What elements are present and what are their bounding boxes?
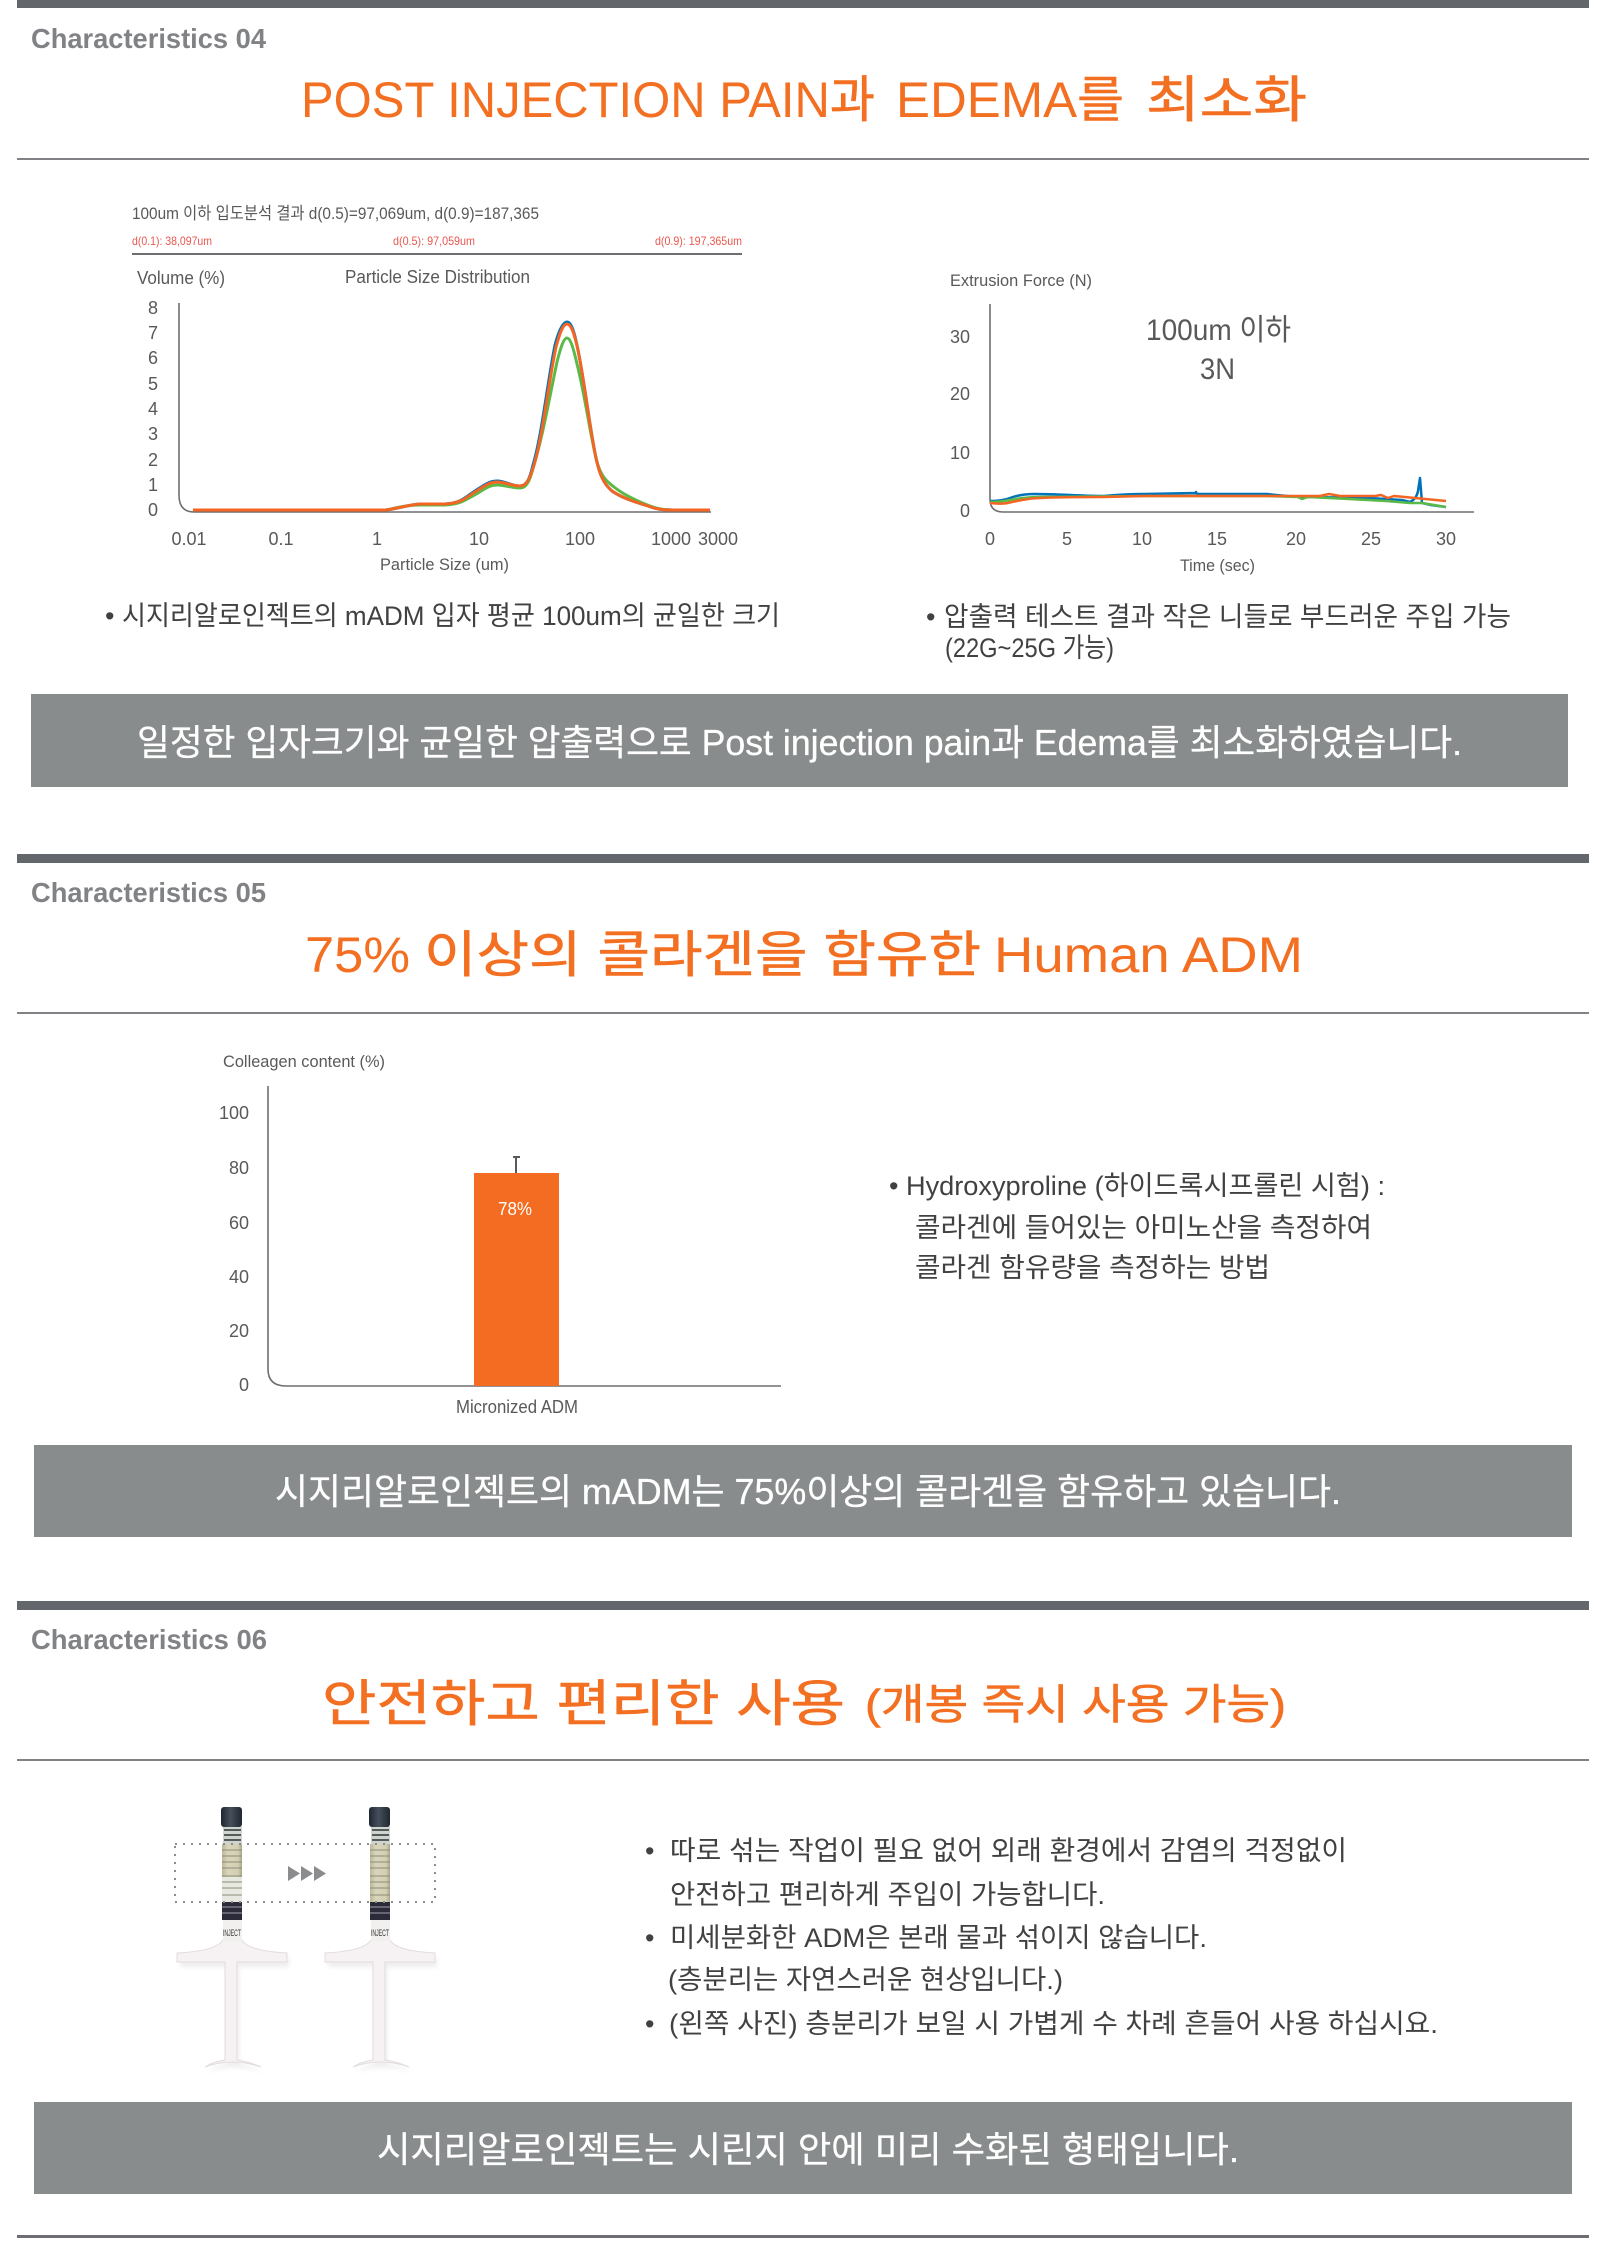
y axis ticks: 30 (950, 327, 970, 347)
panel: characteristics 06 (17, 1601, 1589, 2238)
text: extrusion note: 압출력 테스트 결과 작은 니들로 부드러운 주입 가능 (944, 602, 1511, 632)
x axis ticks: 15 (1207, 529, 1227, 549)
annotation 100um: 100um 이하 (1146, 314, 1291, 347)
red percentile labels: d(0.1): 38,097um (132, 234, 212, 248)
banner 04: 일정한 입자크기와 균일한 압출력으로 Post injection pain과 Edema를 최소화하였습니다. (137, 722, 1462, 763)
title: post injection pain (301, 72, 1307, 128)
title: safe and convenient: 안전하고 편리한 사용 (322, 1676, 845, 1732)
title: collagen: Human ADM (994, 927, 1303, 983)
section bar 05 (17, 854, 1589, 863)
dotted highlight box (175, 1844, 435, 1902)
title: collagen: 이상의 콜라겐을 함유한 (424, 927, 981, 983)
y axis ticks: 40 (229, 1267, 249, 1287)
y axis ticks: 0 (148, 500, 158, 520)
curve: blue (193, 322, 710, 510)
title: post injection pain: EDEMA를 (896, 72, 1124, 128)
x axis ticks: 0.1 (268, 529, 294, 549)
axes (179, 303, 711, 512)
y axis ticks: 0 (239, 1375, 249, 1395)
y axis ticks: 60 (229, 1213, 249, 1233)
y axis title: Volume (%) (137, 268, 225, 288)
title: post injection pain: 최소화 (1146, 72, 1307, 128)
bar: micronized ADM (474, 1173, 559, 1386)
text: extrusion note: (22G~25G 가능) (945, 633, 1114, 663)
x axis ticks: 100 (565, 529, 595, 549)
banner 06: 시지리알로인젝트는 시린지 안에 미리 수화된 형태입니다. (377, 2129, 1239, 2170)
title rule 04 (17, 158, 1589, 160)
illustration: syringes (175, 1807, 437, 2072)
axes (990, 304, 1474, 512)
red percentile labels: d(0.9): 197,365um (655, 234, 742, 248)
x axis ticks (985, 529, 1456, 549)
text: usage notes: (층분리는 자연스러운 현상입니다.) (668, 1965, 1063, 1995)
syringe left: INJECT (223, 1928, 241, 1938)
x axis ticks: 25 (1361, 529, 1381, 549)
banner 06 (34, 2102, 1572, 2194)
section bar 04 (17, 0, 1589, 8)
y axis ticks: 1 (148, 475, 158, 495)
section label 04: Characteristics 04 (31, 23, 266, 54)
annotation 3N: 3N (1200, 353, 1235, 386)
text: particle size note: • (105, 601, 114, 631)
y axis ticks (950, 327, 970, 521)
y axis ticks: 0 (960, 501, 970, 521)
text: usage notes: 안전하고 편리하게 주입이 가능합니다. (670, 1880, 1105, 1910)
panel: characteristics 05 (17, 854, 1589, 1537)
y axis ticks (219, 1103, 249, 1395)
bar category: Micronized ADM (456, 1397, 578, 1417)
y axis ticks: 20 (229, 1321, 249, 1341)
x axis ticks (171, 529, 738, 549)
error bar (513, 1157, 520, 1173)
curve: green (990, 496, 1446, 507)
text: hydroxyproline note: • (889, 1171, 898, 1201)
y axis ticks: 80 (229, 1158, 249, 1178)
heading rule (132, 253, 742, 255)
section label 05: Characteristics 05 (31, 877, 266, 908)
text: hydroxyproline note (889, 1171, 1385, 1283)
syringe left (177, 1807, 289, 2072)
y axis ticks: 8 (148, 298, 158, 318)
syringe right (325, 1807, 437, 2072)
title: safe and convenient: (개봉 즉시 사용 가능) (865, 1681, 1286, 1728)
x axis ticks: 30 (1436, 529, 1456, 549)
x axis ticks: 20 (1286, 529, 1306, 549)
banner 05 (34, 1445, 1572, 1537)
y axis ticks: 5 (148, 374, 158, 394)
curve: green (193, 338, 710, 510)
syringe right: INJECT (371, 1928, 389, 1938)
red percentile labels: d(0.5): 97,059um (393, 234, 475, 248)
y axis ticks: 3 (148, 424, 158, 444)
chart heading: 100um 이하 입도분석 결과 d(0.5)=97,069um, d(0.9)=187,365 (132, 204, 539, 223)
y axis ticks: 20 (950, 384, 970, 404)
title: safe and convenient (322, 1676, 1286, 1732)
text: hydroxyproline note: 콜라겐에 들어있는 아미노산을 측정하여 (915, 1213, 1372, 1243)
x axis ticks: 0 (985, 529, 995, 549)
text: usage notes: (왼쪽 사진) 층분리가 보일 시 가볍게 수 차례 흔들어 사용 하십시요. (669, 2009, 1438, 2039)
curve: orange (990, 494, 1446, 504)
chart title: Particle Size Distribution (345, 267, 530, 287)
chart: particle size distribution (132, 204, 742, 574)
text: extrusion note (926, 602, 1511, 663)
y axis ticks: 100 (219, 1103, 249, 1123)
bar value: 78% (498, 1199, 532, 1219)
y axis title: Colleagen content (%) (223, 1052, 385, 1071)
curve: blue (990, 478, 1446, 507)
title rule 05 (17, 1012, 1589, 1014)
y axis ticks: 6 (148, 348, 158, 368)
text: extrusion note: • (926, 602, 935, 632)
red percentile labels (132, 234, 742, 248)
y axis ticks: 7 (148, 323, 158, 343)
title rule 06 (17, 1759, 1589, 1761)
x axis ticks: 10 (1132, 529, 1152, 549)
text: usage notes (645, 1836, 1438, 2039)
banner 04 (31, 694, 1568, 787)
section label 06: Characteristics 06 (31, 1624, 267, 1655)
text: particle size note: 시지리알로인젝트의 mADM 입자 평균 100um의 균일한 크기 (122, 601, 780, 631)
title: collagen (305, 927, 1303, 983)
section bar 06 (17, 1601, 1589, 1610)
text: usage notes: • (645, 2009, 654, 2039)
title: collagen: 75% (305, 927, 410, 983)
x axis title: Time (sec) (1180, 556, 1255, 575)
y axis ticks: 4 (148, 399, 158, 419)
arrows (288, 1866, 326, 1881)
x axis ticks: 3000 (698, 529, 738, 549)
y axis ticks: 10 (950, 443, 970, 463)
x axis ticks: 1 (372, 529, 382, 549)
bottom rule (17, 2235, 1589, 2238)
chart: extrusion force (950, 271, 1474, 575)
y axis ticks (148, 298, 158, 520)
axes (268, 1086, 781, 1386)
text: usage notes: • (645, 1836, 654, 1866)
x axis ticks: 10 (469, 529, 489, 549)
x axis ticks: 5 (1062, 529, 1072, 549)
chart: collagen content (219, 1052, 781, 1417)
curve: orange (193, 324, 710, 510)
x axis ticks: 1000 (651, 529, 691, 549)
y axis title: Extrusion Force (N) (950, 271, 1092, 290)
text: usage notes: 따로 섞는 작업이 필요 없어 외래 환경에서 감염의 걱정없이 (670, 1836, 1347, 1866)
banner 05: 시지리알로인젝트의 mADM는 75%이상의 콜라겐을 함유하고 있습니다. (275, 1471, 1341, 1512)
title: post injection pain: POST INJECTION PAIN과 (301, 72, 875, 128)
text: hydroxyproline note: Hydroxyproline (하이드록시프롤린 시험) : (906, 1171, 1385, 1201)
x axis title: Particle Size (um) (380, 555, 509, 574)
x axis ticks: 0.01 (171, 529, 207, 549)
text: hydroxyproline note: 콜라겐 함유량을 측정하는 방법 (915, 1253, 1270, 1283)
text: usage notes: • (645, 1923, 654, 1953)
text: usage notes: 미세분화한 ADM은 본래 물과 섞이지 않습니다. (670, 1923, 1207, 1953)
panel: characteristics 04 (17, 0, 1589, 787)
y axis ticks: 2 (148, 450, 158, 470)
